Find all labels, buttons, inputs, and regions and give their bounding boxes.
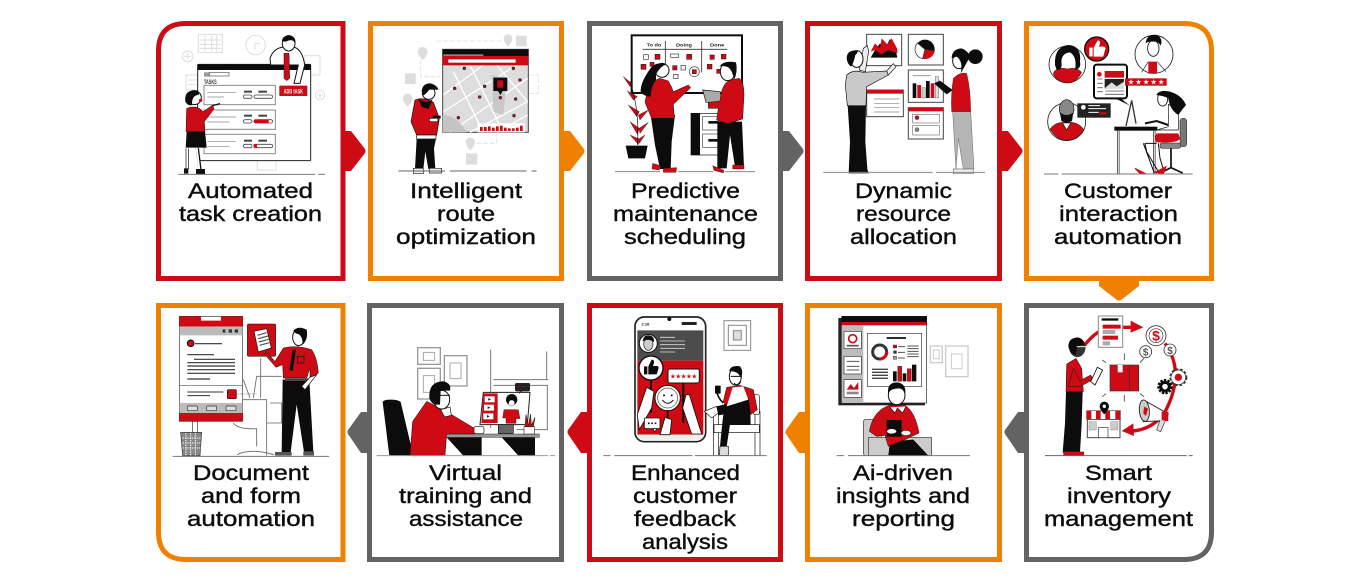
icon: thumbs up — [1085, 37, 1109, 61]
card frame — [1026, 306, 1212, 560]
kanban board: Done — [710, 43, 725, 49]
arrow: step 8 to 9 — [568, 412, 587, 453]
browser task window — [198, 64, 311, 161]
avatar: woman — [1049, 45, 1086, 83]
hands holding signs — [637, 387, 702, 435]
office chair — [383, 400, 413, 456]
icon: thumbs up sign — [639, 356, 663, 413]
review screen — [1094, 65, 1130, 106]
heading — [179, 179, 322, 226]
courier figure — [411, 83, 442, 174]
illustration: phone with feedback signs — [603, 317, 767, 456]
heading: insights and — [836, 484, 970, 508]
heading: management — [1044, 507, 1193, 531]
panel: Smart inventory management — [1026, 306, 1212, 560]
card frame — [808, 24, 1000, 278]
icon: gears — [1160, 370, 1186, 392]
heading: Dynamic — [855, 179, 952, 203]
desk and office chair — [233, 358, 282, 456]
heading: scheduling — [624, 225, 746, 249]
card frame — [370, 24, 562, 278]
card frame — [370, 306, 562, 560]
plant — [623, 77, 648, 144]
heading: assistance — [409, 507, 523, 531]
chair — [1160, 118, 1187, 173]
kanban board — [632, 35, 742, 93]
form screen — [179, 316, 243, 421]
heading: allocation — [850, 225, 957, 249]
comments card — [908, 108, 943, 139]
heading: Ai-driven — [853, 461, 953, 485]
illustration: team at kanban board — [615, 35, 755, 173]
arrow: step 9 to 10 — [348, 412, 367, 453]
wall frames — [418, 348, 467, 399]
heading: optimization — [396, 225, 536, 249]
man holding document — [265, 328, 318, 456]
kanban board: To do — [647, 43, 661, 49]
heading: Virtual — [429, 461, 502, 485]
smiley sign — [655, 385, 680, 430]
heading: training and — [399, 484, 532, 508]
woman pointing at task — [184, 90, 220, 174]
woman — [641, 63, 691, 172]
heading: Document — [193, 461, 309, 485]
heading: inventory — [1067, 484, 1171, 508]
trash bin — [181, 421, 202, 456]
pen cup — [524, 414, 535, 434]
bar chart card — [908, 70, 943, 102]
heading — [399, 461, 532, 531]
arrow: step 1 to 2 — [345, 131, 366, 171]
wall frames — [930, 346, 968, 377]
desk — [445, 434, 539, 456]
illustration: people adding tasks to a board: TASKS — [204, 80, 217, 86]
heading: feedback — [634, 507, 736, 531]
arrow: step 4 to 5 — [1002, 131, 1022, 171]
panel: Customer interaction automation — [1026, 24, 1212, 278]
smartphone: 2:26 — [641, 321, 650, 326]
panel: Intelligent route optimization — [370, 24, 562, 278]
heading — [1044, 461, 1193, 531]
seated man with phone — [704, 366, 760, 456]
illustration: inventory cycle: $ — [1143, 348, 1149, 359]
chat bubble — [1077, 103, 1111, 118]
cycle arrows — [1084, 327, 1175, 431]
cabinet — [691, 113, 720, 155]
arrow: step 5 to 6 — [1099, 281, 1139, 300]
man in grey shirt — [845, 46, 896, 173]
man leaning over window — [270, 36, 305, 83]
document in red tile — [247, 324, 276, 356]
seated woman — [1135, 91, 1186, 174]
wall frame — [724, 321, 751, 350]
video call monitor — [480, 392, 530, 434]
icon: dollar coins — [1140, 326, 1176, 358]
avatar: man — [1135, 35, 1173, 74]
illustration: man with digital forms — [173, 316, 329, 456]
arrow: step 2 to 3 — [564, 131, 584, 171]
add task button — [279, 86, 307, 96]
illustration: customer chat and reviews — [1044, 35, 1193, 174]
pie chart card — [908, 34, 943, 65]
panel: Automated task creation — [158, 24, 343, 278]
heading — [850, 179, 957, 249]
illustration: people adding tasks to a board — [178, 34, 325, 174]
heading: Customer — [1064, 179, 1172, 203]
illustration: video training at desk — [377, 348, 555, 456]
arrow: step 7 to 8 — [786, 412, 805, 453]
area chart card — [867, 34, 902, 66]
text window card — [867, 90, 903, 117]
window — [491, 350, 548, 430]
illustration: courier with route map — [398, 34, 538, 174]
heading: analysis — [642, 530, 728, 554]
man at desk — [410, 381, 484, 456]
heading: task creation — [179, 202, 322, 226]
kanban board: Doing — [676, 43, 692, 49]
illustration: analyst with reports dashboard — [837, 316, 970, 456]
heading: resource — [856, 202, 951, 226]
heading: interaction — [1059, 202, 1178, 226]
route map window — [443, 49, 528, 132]
panel: Virtual training and assistance — [370, 306, 562, 560]
panel: Dynamic resource allocation — [808, 24, 1000, 278]
dashboard window — [838, 316, 927, 405]
heading: customer — [633, 484, 737, 508]
panel: Ai-driven insights and reporting — [808, 306, 1000, 560]
heading — [396, 179, 536, 249]
heading — [631, 461, 740, 554]
card frame — [590, 306, 780, 560]
heading — [613, 179, 758, 249]
woman in red top — [934, 48, 983, 174]
heading: and form — [201, 484, 301, 508]
armchair — [863, 419, 932, 456]
heading: Enhanced — [631, 461, 740, 485]
man with tablet — [869, 382, 928, 456]
icon: storefront with pin — [1087, 402, 1121, 438]
chat sign — [644, 418, 660, 432]
heading: reporting — [852, 507, 955, 531]
star rating bar: ★★★★★ — [1128, 77, 1164, 86]
icon: megaphone — [1138, 400, 1168, 432]
panel: Enhanced customer feedback analysis — [590, 306, 780, 560]
arrow: step 6 to 7 — [1004, 412, 1024, 453]
icon: package box — [1110, 365, 1139, 391]
arrow: step 3 to 4 — [783, 131, 804, 171]
card frame — [158, 24, 343, 278]
card frame — [808, 306, 1000, 560]
card frame — [1026, 24, 1212, 278]
man — [703, 62, 744, 173]
heading — [836, 461, 970, 531]
avatar: bald man with beard — [1048, 100, 1086, 141]
card frame — [590, 24, 780, 278]
desk with computer — [1114, 100, 1157, 174]
chat bubble — [515, 383, 530, 394]
heading: automation — [1054, 225, 1182, 249]
card frame — [158, 306, 343, 560]
heading: maintenance — [613, 202, 758, 226]
heading: Intelligent — [410, 179, 522, 203]
panel: Document and form automation — [158, 306, 343, 560]
illustration: inventory cycle — [1045, 316, 1193, 456]
illustration: inventory cycle: $ — [1152, 328, 1160, 344]
smartphone — [635, 317, 706, 442]
report document — [1098, 316, 1123, 347]
man with clipboard — [1063, 338, 1103, 456]
star rating sign — [668, 369, 699, 423]
heading: route — [437, 202, 495, 226]
illustration: people reviewing dashboards — [823, 34, 985, 174]
heading: Predictive — [631, 179, 740, 203]
panel: Predictive maintenance scheduling — [590, 24, 780, 278]
heading: Automated — [188, 179, 313, 203]
heading — [1054, 179, 1182, 249]
heading — [187, 461, 315, 531]
add task button: ADD tASK — [284, 89, 303, 96]
heading: Smart — [1085, 461, 1152, 485]
illustration: inventory cycle: $ — [1167, 346, 1173, 357]
heading: automation — [187, 507, 315, 531]
star rating sign: ★★★★★ — [670, 372, 697, 380]
spokes around box — [1102, 353, 1144, 402]
